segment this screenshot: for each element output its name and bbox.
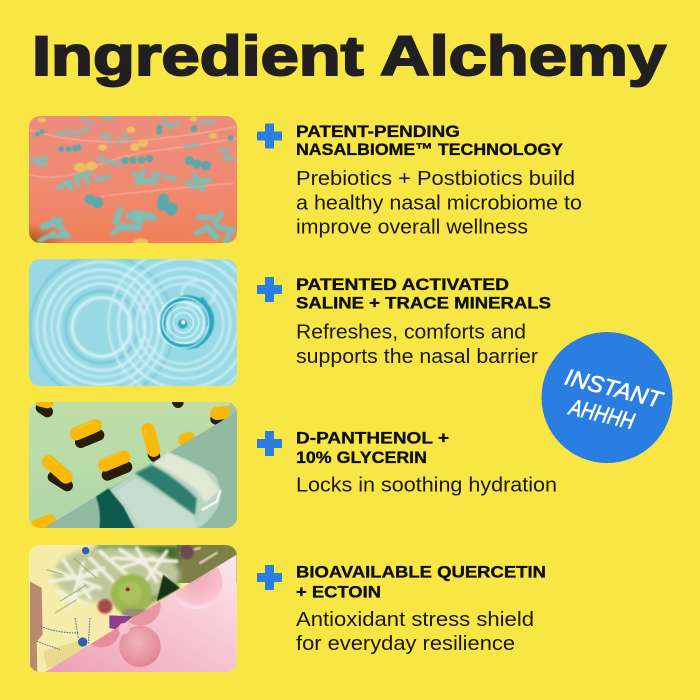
image: yellow capsules and clear gel — [29, 398, 239, 530]
item 3: heading: 10% GLYCERIN — [296, 448, 427, 467]
item 1: heading: NASALBIOME™ TECHNOLOGY — [296, 140, 564, 159]
item 1: heading: PATENT-PENDING — [296, 122, 460, 141]
item 2: description: supports the nasal barrier — [296, 345, 538, 368]
item 1: description: a healthy nasal microbiome to — [296, 192, 582, 214]
item 1: description — [296, 167, 582, 238]
item 2: heading — [296, 275, 551, 312]
item 3: heading — [296, 428, 449, 467]
item 4: heading: + ECTOIN — [296, 582, 381, 602]
item 2: heading: PATENTED ACTIVATED — [296, 275, 509, 294]
item 1: description: Prebiotics + Postbiotics build — [296, 167, 575, 190]
item 4: description — [296, 608, 534, 655]
badge: instant ahhhh: INSTANT — [562, 364, 667, 413]
image: flowers and pink bubbles — [29, 543, 240, 674]
item 2: plus icon — [257, 277, 282, 302]
item 3: description: Locks in soothing hydration — [296, 474, 557, 496]
item 1: heading — [296, 122, 564, 159]
item 3: plus icon — [257, 431, 282, 456]
item 3: heading: D-PANTHENOL + — [296, 428, 449, 448]
title: Ingredient Alchemy — [32, 24, 666, 87]
item 1: plus icon — [257, 124, 282, 148]
image: bacteria on coral tissue — [29, 116, 237, 245]
item 4: description: for everyday resilience — [296, 632, 515, 655]
item 4: heading — [296, 562, 546, 602]
item 2: description — [296, 320, 538, 368]
badge: instant ahhhh — [542, 332, 672, 463]
item 2: heading: SALINE + TRACE MINERALS — [296, 294, 551, 312]
badge: instant ahhhh: AHHHH — [565, 393, 637, 434]
item 1: description: improve overall wellness — [296, 216, 528, 238]
item 4: plus icon — [257, 565, 282, 590]
item 4: description: Antioxidant stress shield — [296, 608, 534, 631]
image: water ripples — [29, 259, 237, 386]
item 2: description: Refreshes, comforts and — [296, 320, 526, 344]
item 4: heading: BIOAVAILABLE QUERCETIN — [296, 562, 546, 582]
